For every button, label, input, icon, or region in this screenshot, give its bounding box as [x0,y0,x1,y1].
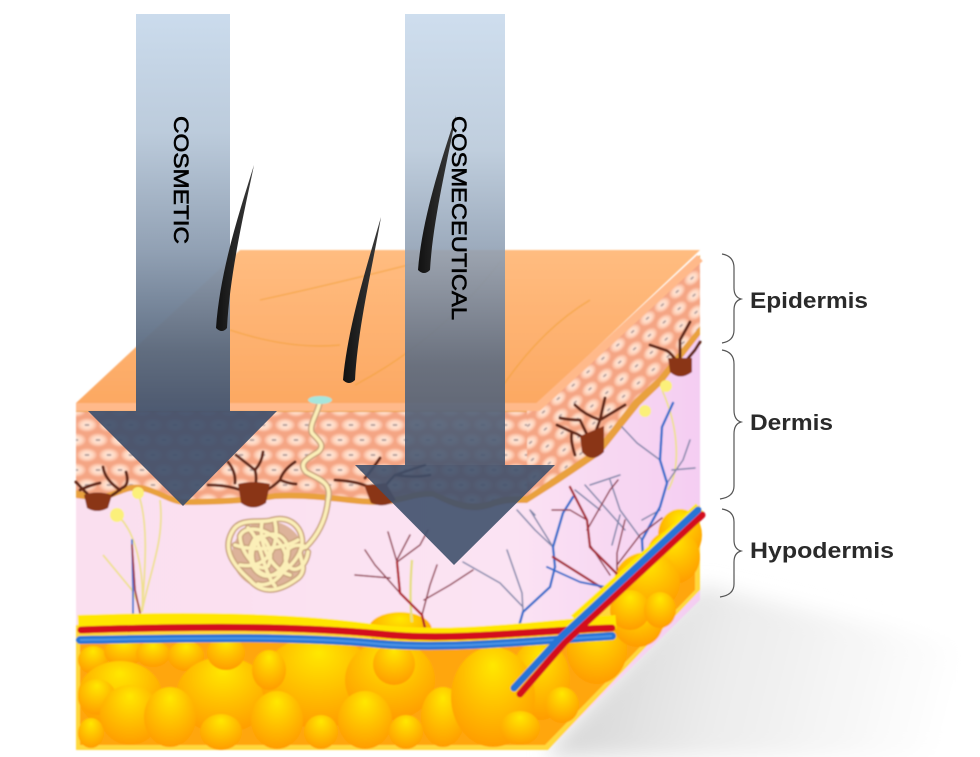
epidermis front face with cells [76,403,527,510]
top surface of the skin [76,250,700,403]
melanocytes [76,322,700,503]
dermis layer [76,300,700,750]
epidermis side face with cells [76,255,700,503]
label: Dermis: Dermis [750,410,833,435]
nerves [103,380,676,622]
bracket: hypodermis [720,509,741,597]
label: Epidermis: Epidermis [750,288,868,313]
arrow: cosmetic [88,14,277,506]
bracket: dermis [720,350,741,499]
bracket: epidermis [722,254,741,343]
hair strands [216,115,456,383]
label: COSMETIC: COSMETIC [169,116,192,244]
sweat gland [228,396,332,590]
skin block [76,250,702,750]
arrow: cosmeceutical [355,14,555,565]
label: Hypodermis: Hypodermis [750,538,894,563]
cast shadow [548,585,980,757]
label: COSMECEUTICAL: COSMECEUTICAL [447,116,470,320]
arteries and veins branches [132,403,695,637]
main blood vessels [78,508,702,694]
hypodermis fat layer [76,505,702,750]
